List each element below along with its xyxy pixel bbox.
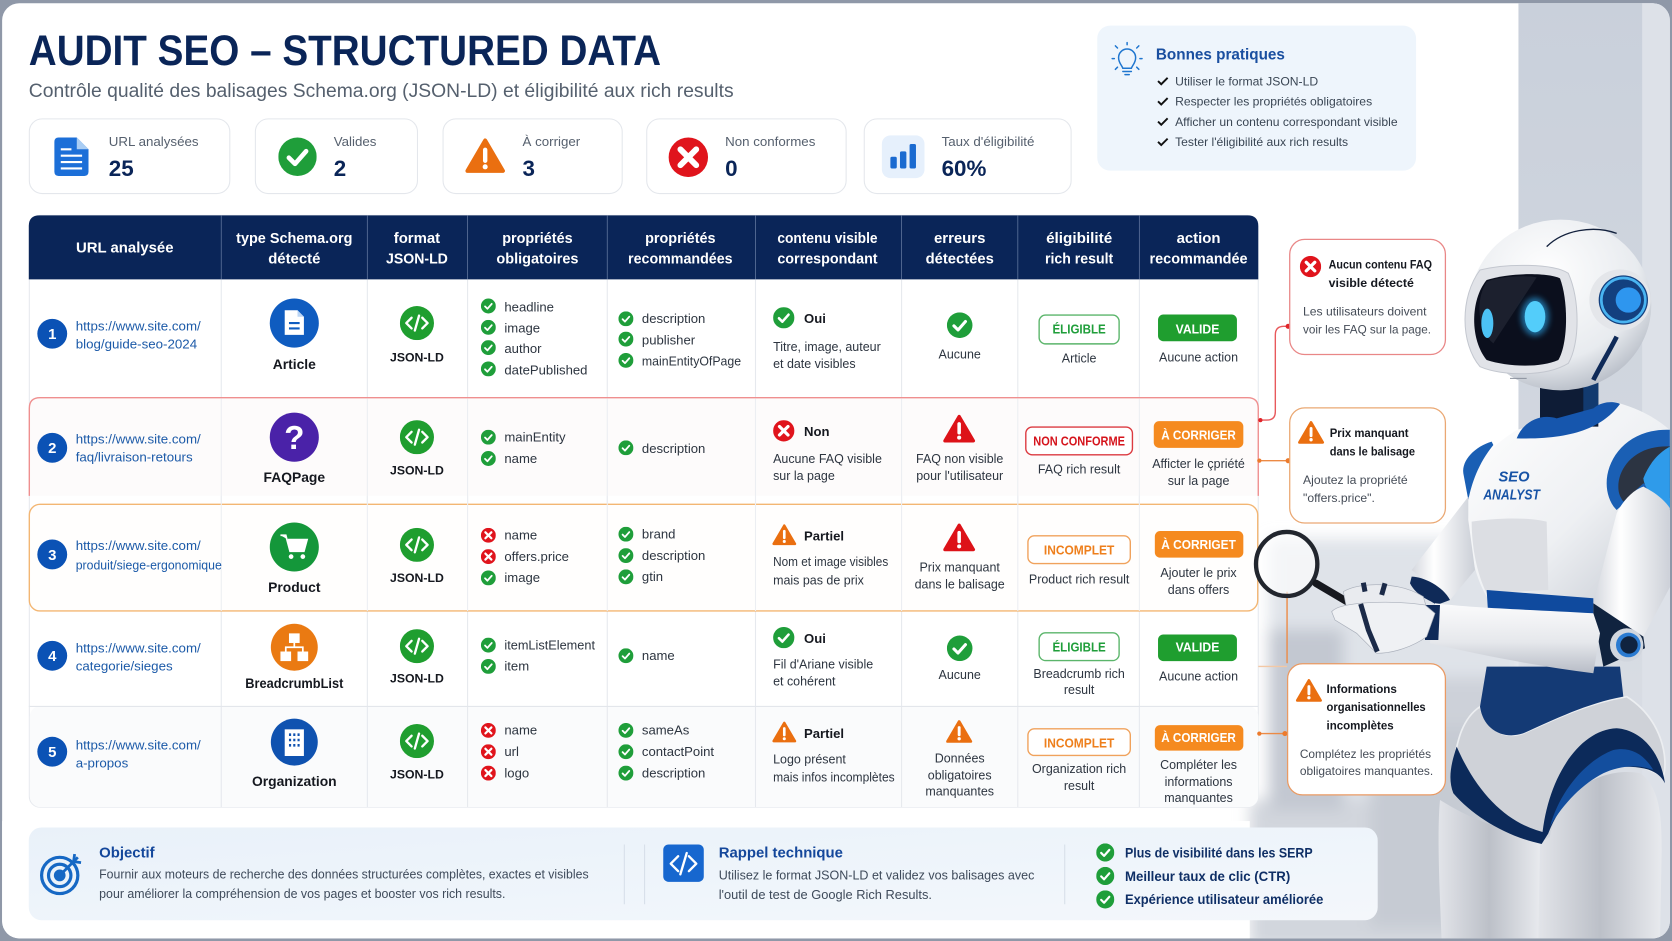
row 2: FAQPage: Afficter le çpriété xyxy=(1152,457,1245,471)
row 1: Article: Aucune xyxy=(939,347,981,361)
row 2: FAQPage: pour l'utilisateur xyxy=(916,469,1003,483)
row 5: Organization: À CORRIGER xyxy=(1161,730,1236,745)
KPI: Taux d'éligibilité xyxy=(864,119,1071,194)
row 5: Organization: Logo présent xyxy=(773,752,846,766)
row 3: Product: JSON-LD xyxy=(390,571,444,585)
icon: document xyxy=(54,138,89,176)
benefits list: Meilleur taux de clic (CTR) xyxy=(1125,868,1290,884)
row 5: Organization: 5 xyxy=(48,744,56,761)
row 5: Organization: logo xyxy=(504,765,529,780)
table header: format xyxy=(394,230,440,247)
row 3: Product: À CORRIGET xyxy=(1161,537,1236,552)
row 1: Article: Article xyxy=(273,356,316,372)
row 1: Article xyxy=(37,299,1238,377)
footer panel xyxy=(29,827,1378,920)
callout: aucun contenu FAQ: Aucun contenu FAQ xyxy=(1329,258,1432,272)
robot illustration: ANALYST xyxy=(1483,487,1541,503)
benefits list xyxy=(1096,843,1324,908)
row 3: Product: mais pas de prix xyxy=(773,573,865,587)
row 3: Product: Nom et image visibles xyxy=(773,555,888,569)
objectif text: Objectif xyxy=(99,844,155,861)
row 3: Product: gtin xyxy=(642,569,663,584)
row 1: Article: Titre, image, auteur xyxy=(773,340,881,354)
row 4: BreadcrumbList: itemListElement xyxy=(504,637,595,652)
rappel technique text xyxy=(719,844,1034,902)
row 5: Organization: manquantes xyxy=(925,784,994,798)
row 1: Article: blog/guide-seo-2024 xyxy=(76,337,198,352)
right shoulder xyxy=(1607,430,1672,513)
row 1: Article: description xyxy=(642,311,705,326)
row 1: Article: 1 xyxy=(48,326,56,343)
row 3: Product: Prix manquant xyxy=(919,561,1000,575)
KPI: Non conformes xyxy=(647,119,846,194)
row 3: Product: https://www.site.com/ xyxy=(76,538,201,553)
KPI: À corriger: À corriger xyxy=(522,134,581,149)
magnifying glass xyxy=(1256,532,1357,607)
table header: rich result xyxy=(1045,250,1113,267)
row 1: Article: et date visibles xyxy=(773,357,856,371)
row 5: Organization: description xyxy=(642,765,705,780)
row 3: Product: INCOMPLET xyxy=(1044,542,1114,557)
table header: erreurs xyxy=(934,230,985,247)
callout: aucun contenu FAQ xyxy=(1290,239,1445,355)
row 3: Product xyxy=(37,522,1243,597)
row 5: Organization: name xyxy=(504,723,537,738)
callout: prix manquant: Prix manquant xyxy=(1330,426,1409,440)
row 1: Article: https://www.site.com/ xyxy=(76,319,201,334)
row 1: Article: image xyxy=(504,321,540,336)
title: AUDIT SEO – STRUCTURED DATA xyxy=(29,27,661,75)
row 4: BreadcrumbList: BreadcrumbList xyxy=(245,675,344,691)
icon: question: ? xyxy=(284,420,304,457)
table header: JSON-LD xyxy=(386,250,448,267)
KPI: Taux d'éligibilité: Taux d'éligibilité xyxy=(942,134,1034,149)
robot illustration xyxy=(1256,220,1672,941)
row 1: Article: Aucune action xyxy=(1159,350,1238,364)
table header: URL analysée xyxy=(76,240,174,257)
callout: informations organisationnelles: organisationnelles xyxy=(1327,700,1426,714)
row 5: Organization xyxy=(37,719,1243,805)
row 4: BreadcrumbList: 4 xyxy=(48,648,57,665)
row 2: FAQPage: FAQ rich result xyxy=(1038,462,1121,476)
icon: warning xyxy=(1299,422,1323,442)
row 4: BreadcrumbList: Aucune action xyxy=(1159,669,1238,683)
KPI: URL analysées xyxy=(29,119,230,194)
row 5: Organization: contactPoint xyxy=(642,744,714,759)
row 5: Organization: Organization rich xyxy=(1032,762,1126,776)
row 2: FAQPage xyxy=(37,413,1245,488)
row 5: Organization: result xyxy=(1064,779,1095,793)
icon: question xyxy=(270,413,319,462)
icon: warning xyxy=(467,140,503,171)
row 3: Product: dans offers xyxy=(1168,583,1229,597)
row 2: FAQPage: Non xyxy=(804,424,829,439)
row 5: Organization: INCOMPLET xyxy=(1044,735,1114,750)
row highlight: FAQPage xyxy=(29,398,1258,496)
callout: prix manquant xyxy=(1290,408,1445,523)
table header: propriétés xyxy=(645,230,716,247)
callout: aucun contenu FAQ: voir les FAQ sur la page. xyxy=(1303,323,1431,337)
panel: bonnes pratiques: Bonnes pratiques xyxy=(1156,47,1285,64)
icon: check xyxy=(278,138,317,176)
row 2: FAQPage: FAQPage xyxy=(263,469,325,485)
KPI: À corriger xyxy=(443,119,622,194)
table header: détectées xyxy=(926,250,994,267)
row 4: BreadcrumbList: https://www.site.com/ xyxy=(76,641,201,656)
audit table xyxy=(29,215,1258,807)
row 3: Product: Ajouter le prix xyxy=(1160,566,1237,580)
icon: shopping cart xyxy=(270,522,319,572)
row 3: Product: Partiel xyxy=(804,529,844,544)
icon: warning xyxy=(1297,680,1321,700)
row 3: Product: brand xyxy=(642,526,675,541)
row 1: Article: Oui xyxy=(804,311,826,326)
row 2: FAQPage: À CORRIGER xyxy=(1161,427,1236,442)
table header: obligatoires xyxy=(496,250,578,267)
icon: bar chart xyxy=(882,135,925,178)
row 3: Product: offers.price xyxy=(504,549,569,564)
KPI: Non conformes: 0 xyxy=(725,156,738,181)
benefits list: Plus de visibilité dans les SERP xyxy=(1125,844,1313,860)
left upper arm xyxy=(1412,497,1475,600)
row 4: BreadcrumbList: VALIDE xyxy=(1176,640,1220,655)
icon: cross xyxy=(669,138,708,177)
row 1: Article: VALIDE xyxy=(1176,322,1220,337)
row 3: Product: dans le balisage xyxy=(915,578,1005,592)
row 4: BreadcrumbList: name xyxy=(642,648,675,663)
callout: prix manquant: "offers.price". xyxy=(1303,491,1375,505)
row 2: FAQPage: FAQ non visible xyxy=(916,452,1003,466)
list of best practices: Afficher un contenu correspondant visible xyxy=(1175,115,1398,129)
row 4: BreadcrumbList: Oui xyxy=(804,631,826,646)
row 5: Organization: a-propos xyxy=(76,756,129,771)
callout: informations organisationnelles: obligatoires manquantes. xyxy=(1300,764,1433,778)
table header: propriétés xyxy=(502,230,573,247)
table header: détecté xyxy=(268,250,320,267)
table header: recommandées xyxy=(628,250,733,267)
icon: target xyxy=(42,854,81,894)
row 2: FAQPage: NON CONFORME xyxy=(1033,434,1125,449)
KPI: Valides xyxy=(255,119,417,194)
row 1: Article: ÉLIGIBLE xyxy=(1052,322,1106,337)
icon: article xyxy=(270,299,319,348)
row 5: Organization: JSON-LD xyxy=(390,767,444,781)
row 5: Organization: Organization xyxy=(252,773,337,789)
row 2: FAQPage: description xyxy=(642,441,705,456)
row 5: Organization: Compléter les xyxy=(1160,758,1237,772)
row 3: Product: name xyxy=(504,528,537,543)
row 5: Organization: Données xyxy=(935,751,985,765)
callout: prix manquant: dans le balisage xyxy=(1330,444,1415,458)
KPI: Valides: Valides xyxy=(334,134,377,149)
row 5: Organization: manquantes xyxy=(1164,791,1233,805)
table header: contenu visible xyxy=(777,230,878,247)
row 4: BreadcrumbList xyxy=(37,624,1238,697)
KPI: URL analysées: 25 xyxy=(109,156,134,181)
row 4: BreadcrumbList: Fil d'Ariane visible xyxy=(773,658,873,672)
row 4: BreadcrumbList: Breadcrumb rich xyxy=(1033,667,1125,681)
table header xyxy=(76,230,1248,267)
row 1: Article: publisher xyxy=(642,332,696,347)
list of best practices: Respecter les propriétés obligatoires xyxy=(1175,95,1372,109)
KPI: À corriger: 3 xyxy=(522,156,535,181)
row 2: FAQPage: JSON-LD xyxy=(390,463,444,477)
row 1: Article: Article xyxy=(1062,352,1097,366)
row 1: Article: author xyxy=(504,341,542,356)
torso xyxy=(1468,402,1672,603)
row 3: Product: image xyxy=(504,570,540,585)
callout: aucun contenu FAQ: Les utilisateurs doivent xyxy=(1303,305,1427,319)
row 2: FAQPage: Aucune FAQ visible xyxy=(773,452,882,466)
list of best practices xyxy=(1158,74,1398,149)
icon: building xyxy=(271,719,318,766)
row 5: Organization: mais infos incomplètes xyxy=(773,771,895,785)
subtitle: Contrôle qualité des balisages Schema.org (JSON-LD) et éligibilité aux rich results xyxy=(29,81,734,102)
row 2: FAQPage: https://www.site.com/ xyxy=(76,432,201,447)
row 4: BreadcrumbList: result xyxy=(1064,683,1095,697)
row 2: FAQPage: sur la page xyxy=(773,469,835,483)
row 5: Organization: url xyxy=(504,744,519,759)
row 4: BreadcrumbList: et cohérent xyxy=(773,675,836,689)
row 3: Product: Product rich result xyxy=(1029,572,1130,586)
row 5: Organization: informations xyxy=(1165,775,1233,789)
row 3: Product: 3 xyxy=(48,547,56,564)
row 5: Organization: sameAs xyxy=(642,723,690,738)
benefits list: Expérience utilisateur améliorée xyxy=(1125,891,1324,907)
panel: bonnes pratiques xyxy=(1097,26,1416,171)
callout: informations organisationnelles xyxy=(1288,664,1445,795)
callout: prix manquant: Ajoutez la propriété xyxy=(1303,473,1408,487)
table header: recommandée xyxy=(1150,250,1248,267)
row 3: Product: produit/siege-ergonomique xyxy=(76,557,222,572)
row 3: Product: Product xyxy=(268,579,321,595)
row 1: Article: mainEntityOfPage xyxy=(642,354,741,369)
KPI: Non conformes: Non conformes xyxy=(725,134,816,149)
table header: éligibilité xyxy=(1046,230,1112,247)
forearm xyxy=(1430,603,1600,673)
row 4: BreadcrumbList: ÉLIGIBLE xyxy=(1052,640,1106,655)
objectif text xyxy=(99,844,589,901)
row 5: Organization: https://www.site.com/ xyxy=(76,738,201,753)
callout: informations organisationnelles: incomplètes xyxy=(1327,718,1394,732)
table header: type Schema.org xyxy=(236,230,352,247)
row highlight: Product xyxy=(29,504,1258,611)
list of best practices: Tester l'éligibilité aux rich results xyxy=(1175,135,1348,149)
objectif text: pour améliorer la compréhension de vos pages et booster vos rich results. xyxy=(99,887,505,901)
robot illustration: SEO xyxy=(1499,470,1530,486)
row 5: Organization: Partiel xyxy=(804,726,844,741)
row 5: Organization: obligatoires xyxy=(928,768,992,782)
robot hand xyxy=(1332,583,1435,653)
row 2: FAQPage: mainEntity xyxy=(504,429,566,444)
table header: action xyxy=(1177,230,1221,247)
row 2: FAQPage: faq/livraison-retours xyxy=(76,450,193,465)
objectif text: Fournir aux moteurs de recherche des données structurées complètes, exactes et visibles xyxy=(99,868,589,882)
KPI: URL analysées: URL analysées xyxy=(109,134,199,149)
callout: informations organisationnelles: Informations xyxy=(1327,682,1397,696)
row 1: Article: headline xyxy=(504,299,554,314)
callout: informations organisationnelles: Complétez les propriétés xyxy=(1300,747,1431,761)
row 2: FAQPage: 2 xyxy=(48,440,56,457)
icon: code xyxy=(663,845,704,882)
row 1: Article: JSON-LD xyxy=(390,350,444,364)
list of best practices: Utiliser le format JSON-LD xyxy=(1175,74,1318,88)
row 4: BreadcrumbList: item xyxy=(504,659,529,674)
table header: correspondant xyxy=(777,250,878,267)
row 3: Product: description xyxy=(642,548,705,563)
icon: hierarchy xyxy=(271,624,318,671)
right elbow xyxy=(1593,603,1645,667)
connector arrows xyxy=(1257,324,1291,736)
icon: light bulb xyxy=(1112,43,1142,75)
rappel technique text: Rappel technique xyxy=(719,844,843,861)
row 4: BreadcrumbList: categorie/sieges xyxy=(76,659,173,674)
callout: aucun contenu FAQ: visible détecté xyxy=(1329,276,1414,290)
row 4: BreadcrumbList: Aucune xyxy=(939,668,981,682)
KPI: Taux d'éligibilité: 60% xyxy=(942,156,986,181)
row 2: FAQPage: sur la page xyxy=(1168,474,1229,488)
icon: cross xyxy=(1300,256,1321,277)
KPI: Valides: 2 xyxy=(334,156,346,181)
row 2: FAQPage: name xyxy=(504,451,537,466)
robot head xyxy=(1465,220,1651,390)
row 4: BreadcrumbList: JSON-LD xyxy=(390,671,444,685)
rappel technique text: Utilisez le format JSON-LD et validez vos balisages avec xyxy=(719,869,1034,883)
rappel technique text: l'outil de test de Google Rich Results. xyxy=(719,888,932,902)
row 1: Article: datePublished xyxy=(504,362,587,377)
